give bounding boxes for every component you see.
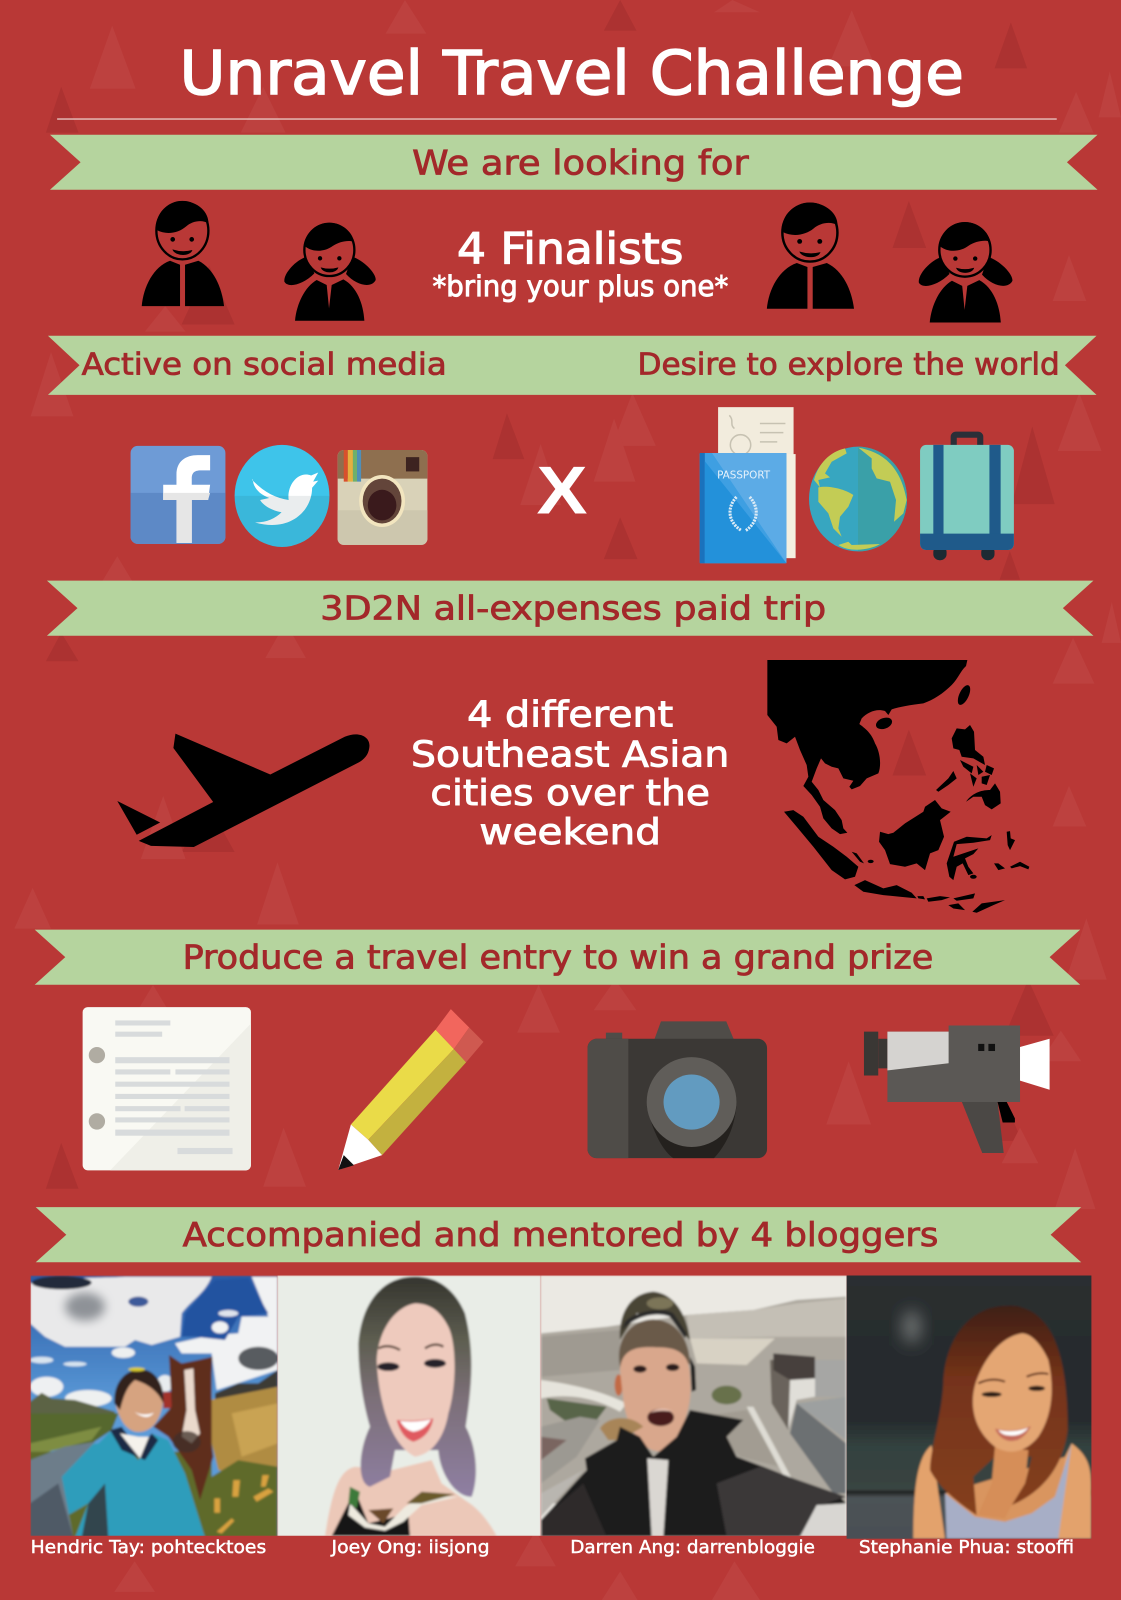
icon: twitter	[235, 445, 329, 547]
icon: passport and ticket: PASSPORT	[717, 469, 771, 482]
panel: blogger photos	[30, 1273, 1093, 1540]
icon: pencil	[338, 1009, 483, 1170]
icon: camera	[588, 1021, 767, 1158]
photo: Darren Ang	[540, 1275, 848, 1538]
ribbon: travel entry	[35, 930, 1080, 985]
ribbon: trip	[47, 581, 1093, 636]
finalists text: 4 Finalists	[457, 224, 683, 274]
icon: instagram	[338, 450, 427, 545]
blogger captions: Stephanie Phua: stooffi	[859, 1537, 1074, 1558]
blogger captions: Hendric Tay: pohtecktoes	[31, 1537, 266, 1558]
icon: document	[83, 1007, 251, 1170]
trip text: 4 different	[467, 695, 673, 736]
ribbon: trip: 3D2N all-expenses paid trip	[320, 589, 826, 627]
icon: man	[142, 201, 224, 306]
trip text: cities over the	[430, 773, 710, 814]
panel: trip details	[117, 660, 1029, 913]
blogger captions	[31, 1537, 1074, 1558]
blogger captions: Darren Ang: darrenbloggie	[570, 1537, 815, 1558]
title: Unravel Travel Challenge	[180, 39, 964, 109]
icon: woman right	[919, 222, 1012, 322]
panel: social and travel icons	[131, 407, 1014, 563]
ribbon: bloggers	[36, 1207, 1081, 1262]
map: southeast asia	[767, 660, 1029, 913]
icon: airplane	[117, 734, 369, 847]
icon: suitcase	[920, 432, 1014, 560]
ribbon: we are looking for	[50, 135, 1098, 190]
trip text: weekend	[479, 812, 661, 853]
trip text: Southeast Asian	[411, 734, 729, 775]
panel: finalists	[142, 201, 1012, 322]
finalists text	[432, 224, 728, 303]
ribbon: criteria: Active on social media	[82, 347, 447, 382]
icon: video camera	[864, 1026, 1050, 1153]
ribbon: travel entry: Produce a travel entry to win a grand prize	[183, 938, 933, 976]
ribbon: criteria	[48, 336, 1097, 395]
icon: passport and ticket	[700, 407, 796, 563]
icon: man right	[767, 203, 854, 309]
photo: Hendric Tay	[30, 1276, 278, 1537]
photo: Stephanie Phua	[845, 1273, 1093, 1540]
finalists text: *bring your plus one*	[432, 269, 728, 303]
ribbon: we are looking for: We are looking for	[412, 143, 749, 182]
multiply sign: X	[537, 453, 588, 528]
blogger captions: Joey Ong: iisjong	[330, 1537, 490, 1558]
title underline	[57, 118, 1057, 120]
icon: globe	[809, 447, 907, 551]
icon: woman	[284, 223, 376, 321]
photo: Joey Ong	[277, 1275, 542, 1538]
panel: entry icons	[83, 1007, 1050, 1170]
ribbon: bloggers: Accompanied and mentored by 4 bloggers	[183, 1216, 938, 1254]
trip text	[411, 695, 729, 853]
ribbon: criteria: Desire to explore the world	[638, 347, 1060, 382]
icon: facebook	[131, 446, 225, 544]
